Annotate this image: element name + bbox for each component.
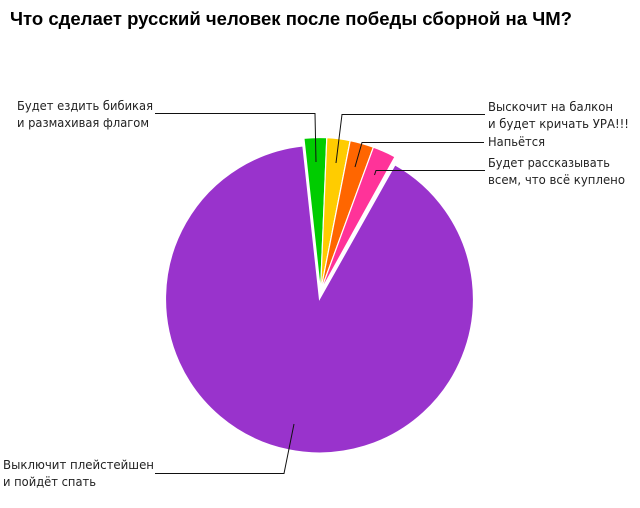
slice: purple <box>165 146 473 453</box>
label: drunk <box>355 135 545 167</box>
label: balcony <box>336 100 629 163</box>
label: playstation: Выключит плейстейшен <box>3 458 154 472</box>
slice: green <box>304 138 327 292</box>
pie chart <box>165 138 473 453</box>
label: drunk: Напьётся <box>488 135 545 149</box>
slice: orange <box>320 141 373 292</box>
label: playstation: и пойдёт спать <box>3 475 96 489</box>
label: bought: всем, что всё куплено <box>488 173 625 187</box>
label: bought: Будет рассказывать <box>488 156 610 170</box>
slice: pink <box>320 147 395 292</box>
label: flag <box>17 99 316 162</box>
label: flag: и размахивая флагом <box>17 116 149 130</box>
label: playstation <box>3 424 294 489</box>
label: balcony: Выскочит на балкон <box>488 100 613 114</box>
label: flag: Будет ездить бибикая <box>17 99 153 113</box>
slice: yellow <box>320 138 350 292</box>
title: Что сделает русский человек после победы сборной на ЧМ? <box>10 9 572 29</box>
label: balcony: и будет кричать УРА!!! <box>488 117 629 131</box>
label: bought <box>374 156 625 187</box>
